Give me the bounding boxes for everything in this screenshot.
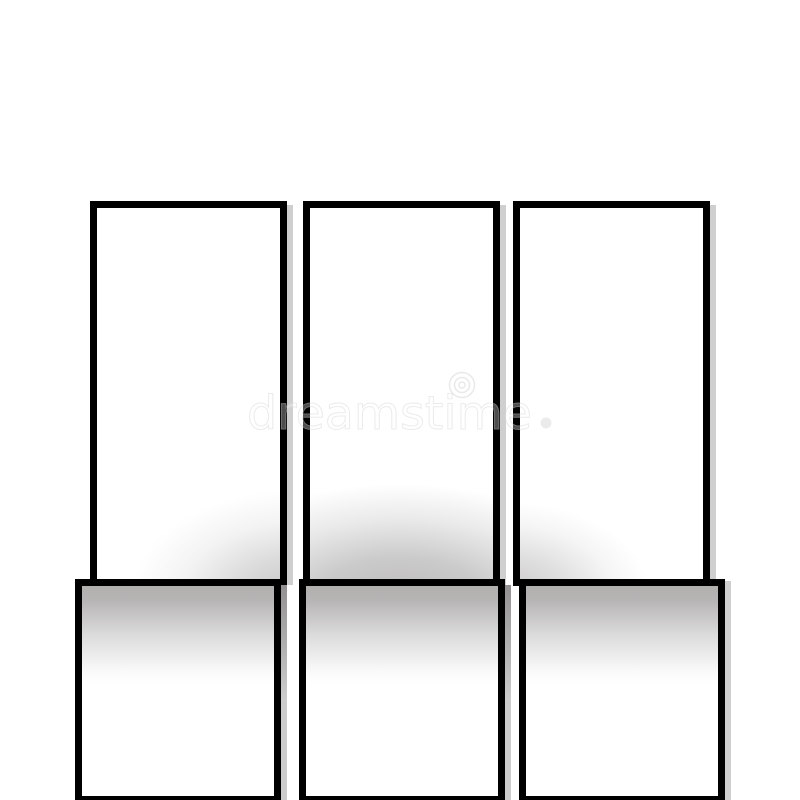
watermark spiral icon [450, 372, 474, 398]
column 3 lower frame [519, 579, 731, 800]
column 1 upper frame [90, 201, 293, 586]
watermark [247, 372, 552, 440]
column 1 lower frame [75, 579, 287, 800]
column 3 upper frame [513, 201, 716, 586]
column 2 upper frame [303, 201, 506, 586]
watermark dot [540, 418, 552, 428]
column 2 lower frame [299, 579, 511, 800]
watermark wordmark: dreamstime [247, 386, 532, 440]
